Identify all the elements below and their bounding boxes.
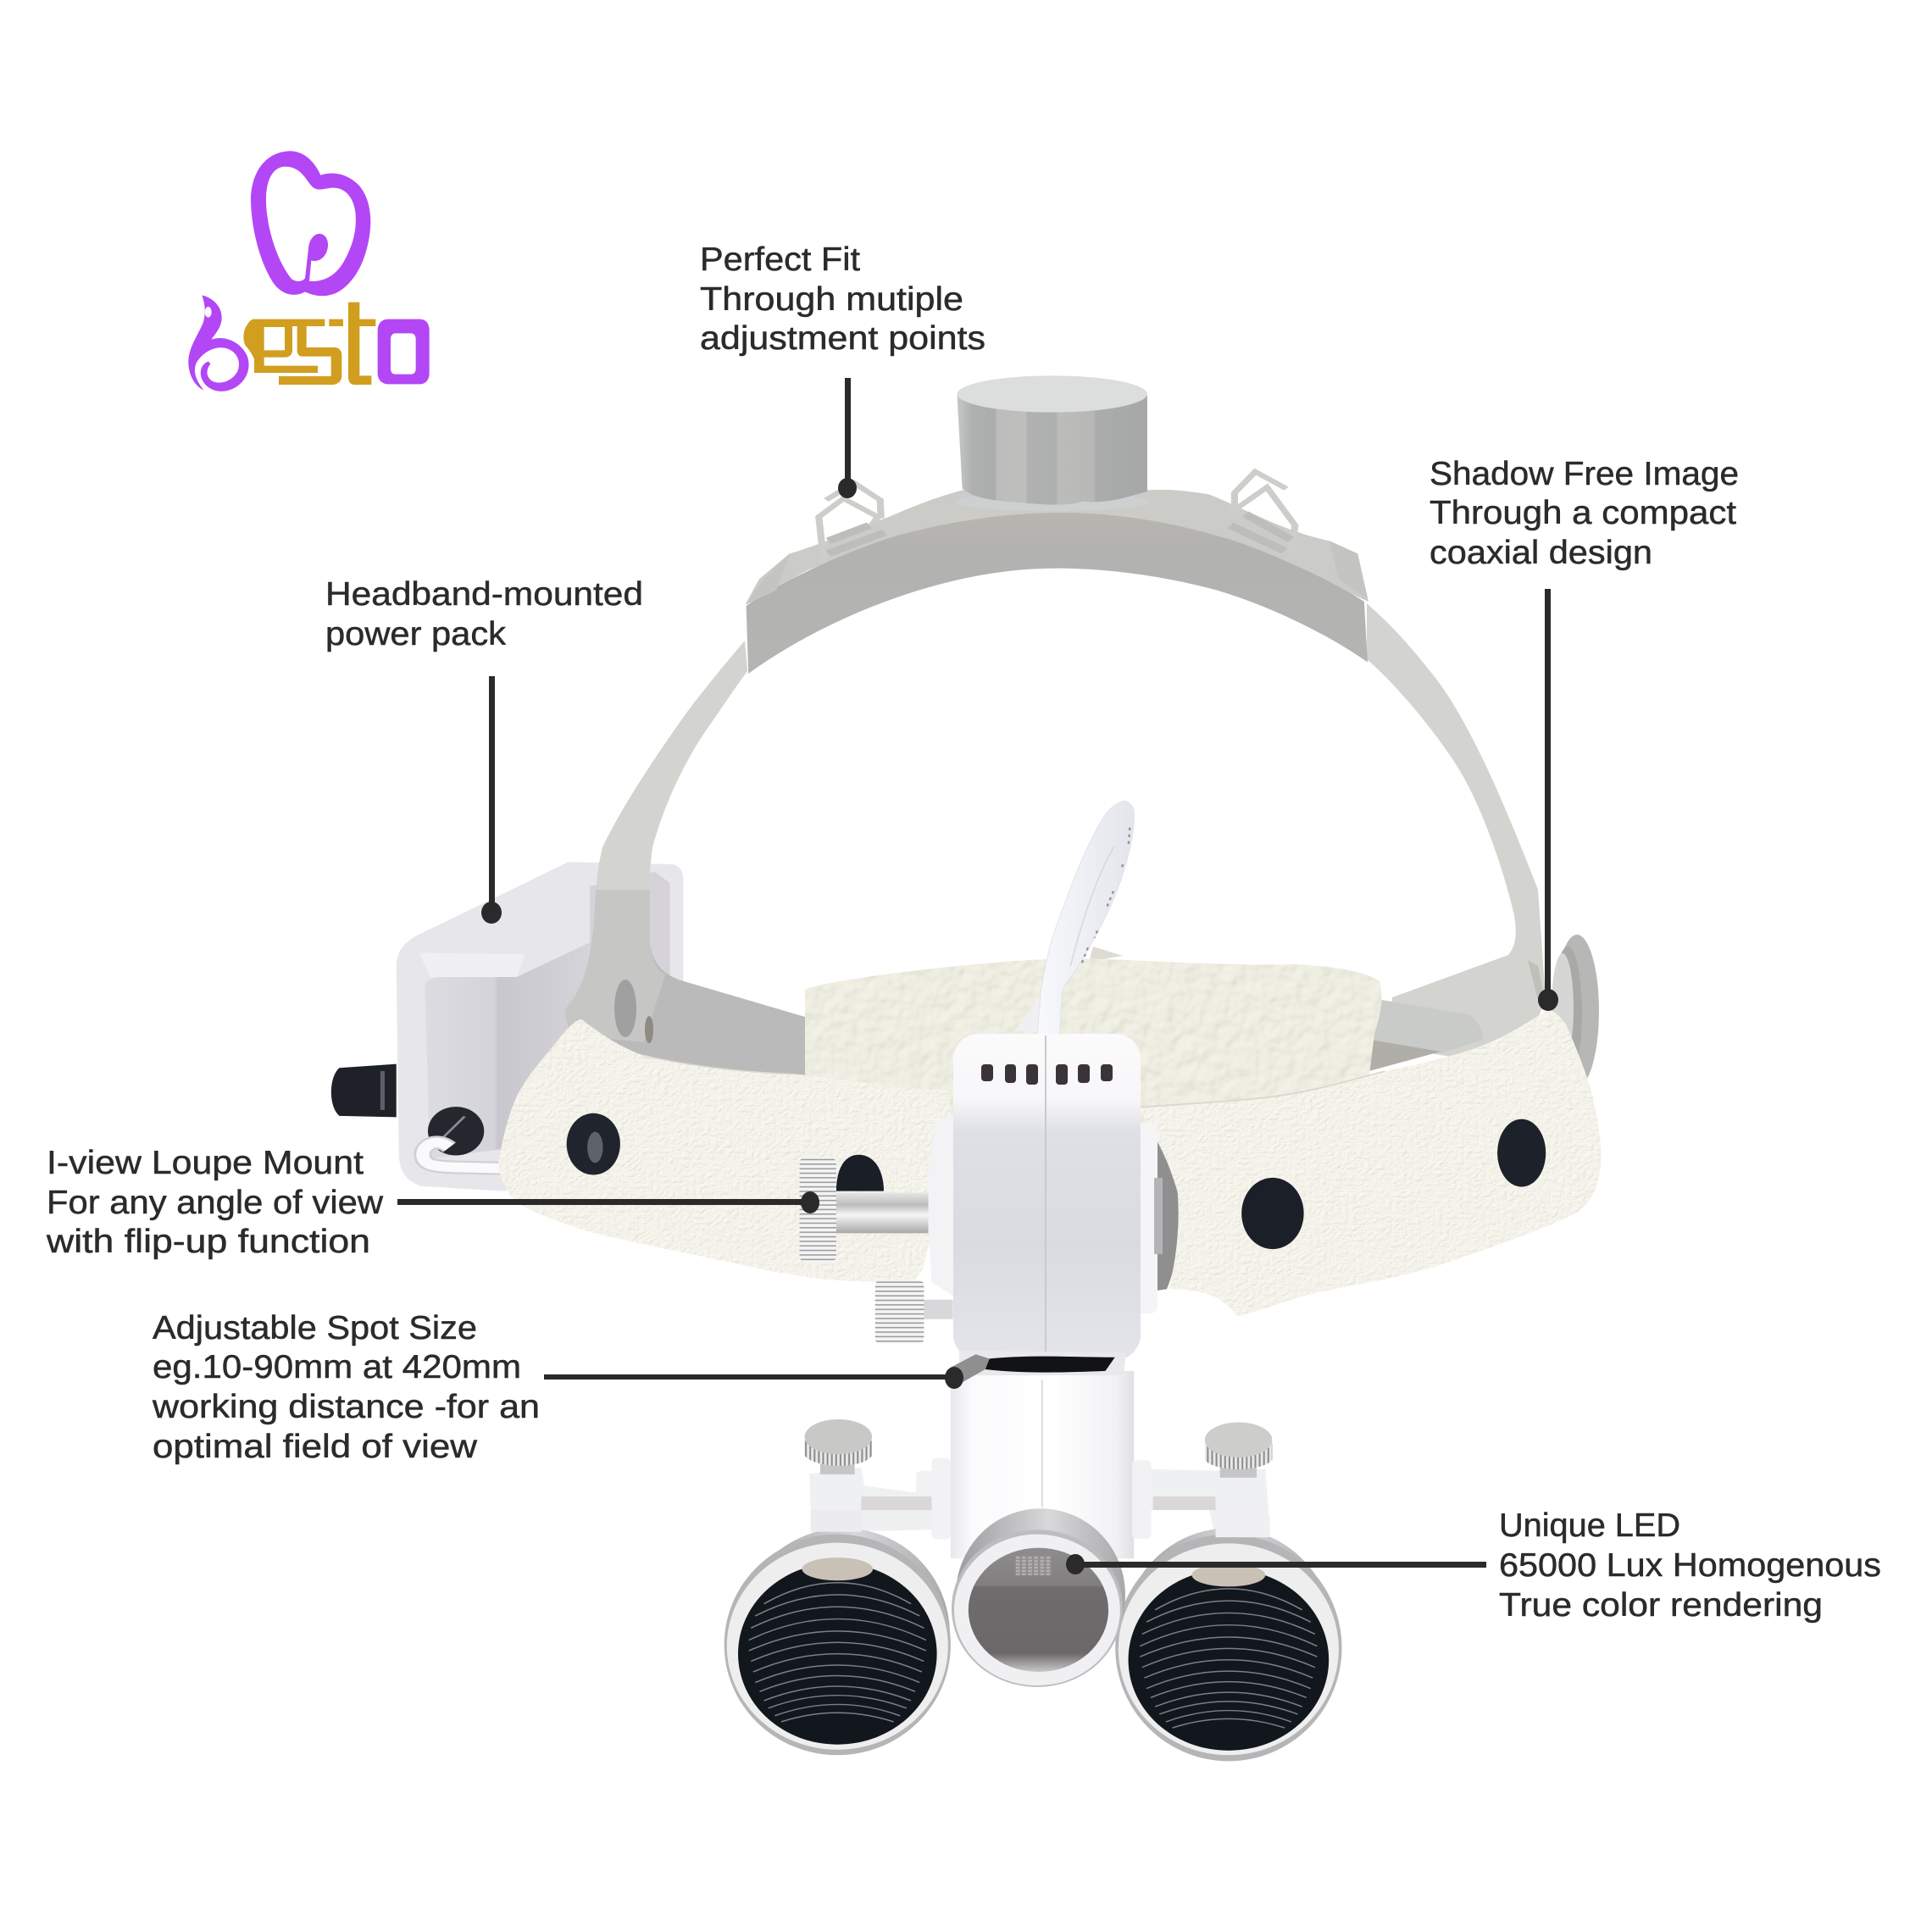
flap top edge shadow	[1139, 1071, 1385, 1108]
plate end caps	[747, 541, 1368, 604]
logo letter: b bird	[188, 295, 249, 391]
logo: besto	[188, 151, 430, 391]
side lugs	[916, 1458, 1152, 1539]
inner highlight	[802, 1557, 873, 1580]
logo letter: s	[279, 319, 343, 385]
ribs	[1140, 1589, 1317, 1728]
dark power knob	[331, 1064, 397, 1117]
flap top edge shadow	[641, 1055, 797, 1074]
logo eye	[205, 307, 212, 318]
leather flap right	[1139, 1009, 1602, 1316]
housing body	[953, 1034, 1141, 1360]
rear leather pad	[805, 958, 1381, 1152]
focus pin	[950, 1354, 990, 1385]
cable ridge	[1070, 846, 1114, 966]
right knurled knob stem	[1220, 1466, 1257, 1478]
LED lens	[969, 1548, 1108, 1672]
callout: shadow free image: coaxial design	[1430, 535, 1652, 571]
knob top	[957, 375, 1147, 413]
grey strap right lower	[1366, 1039, 1441, 1072]
callout: loupe mount: I-view Loupe Mount	[47, 1145, 364, 1181]
outer rim	[724, 1535, 951, 1755]
lower socket	[428, 1107, 484, 1156]
callout: spot size: optimal field of view	[153, 1429, 478, 1465]
snap rivet highlight	[587, 1132, 603, 1163]
headband: top adjustment plate and knob	[746, 375, 1368, 674]
thumbscrew wheel	[800, 1157, 836, 1263]
plate top face	[746, 490, 1368, 604]
thumbscrew shaft	[834, 1193, 929, 1233]
loupe right	[1115, 1528, 1341, 1761]
snap rivet	[836, 1155, 884, 1191]
flap surface	[1139, 1009, 1602, 1316]
callout: perfect fit	[700, 242, 985, 357]
callout: loupe mount: with flip-up function	[46, 1224, 370, 1260]
grey strap right upper	[1366, 997, 1483, 1053]
icon: tooth	[251, 151, 370, 296]
flap surface	[498, 1019, 953, 1282]
box body	[397, 862, 683, 1191]
right bracket	[1135, 1123, 1158, 1313]
barrel	[738, 1528, 950, 1740]
tube seam	[1041, 1380, 1043, 1507]
leather flap left	[498, 1019, 962, 1343]
right knob top	[1205, 1423, 1272, 1457]
mount bracket	[927, 1113, 962, 1302]
callout: spot size	[152, 1310, 540, 1465]
left knurled knob	[805, 1441, 872, 1466]
lower tube	[951, 1371, 1134, 1558]
vent slots	[981, 1064, 1113, 1085]
adjustment clip right	[1230, 472, 1295, 553]
callout: unique LED: True color rendering	[1499, 1587, 1823, 1624]
LED rim	[954, 1535, 1120, 1685]
callout: power pack: power pack	[325, 616, 507, 652]
right arm shade	[1153, 1496, 1216, 1510]
headband: rear leather pad and grey straps	[805, 947, 1483, 1152]
socket highlight	[443, 1117, 464, 1137]
callout: unique LED: 65000 Lux Homogenous	[1499, 1547, 1881, 1584]
housing seam	[1045, 1035, 1046, 1357]
callout: shadow free image	[1430, 456, 1739, 571]
callout: spot size: Adjustable Spot Size	[153, 1310, 477, 1346]
left knurled knob stem	[820, 1462, 855, 1474]
snap rivet	[567, 1113, 620, 1174]
leader line: spot size	[544, 1367, 963, 1389]
disc inner face	[1553, 947, 1582, 1079]
light cable	[1015, 801, 1134, 1042]
leader line: unique LED	[1066, 1554, 1486, 1574]
callout: unique LED: Unique LED	[1499, 1507, 1680, 1544]
plate front face	[747, 513, 1368, 674]
knob body	[957, 396, 1147, 505]
barrel	[1123, 1528, 1335, 1746]
right loupe clamp arm	[1149, 1469, 1270, 1537]
coaxial light housing	[953, 1034, 1163, 1360]
leader line: shadow free	[1538, 589, 1558, 1011]
LED rim outer edge	[952, 1530, 1123, 1687]
box front panel	[425, 941, 598, 1158]
snap rivet	[1497, 1119, 1546, 1187]
headband: left arch strap in front of box	[565, 641, 808, 1080]
ribs	[749, 1583, 926, 1722]
logo letter: o	[378, 319, 430, 384]
black slot band	[985, 1357, 1115, 1373]
callout: spot size: working distance -for an	[152, 1389, 540, 1425]
leader line: loupe mount	[397, 1191, 819, 1213]
pale ring	[1119, 1543, 1339, 1755]
loupe left	[724, 1528, 951, 1755]
leader line: power pack	[481, 676, 502, 924]
strap screw	[645, 1016, 653, 1043]
callout: spot size: eg.10-90mm at 420mm	[153, 1349, 521, 1385]
small secondary cable	[1015, 997, 1040, 1032]
right clamp foot	[1216, 1514, 1269, 1537]
callout: perfect fit: adjustment points	[700, 320, 985, 357]
power pack box	[331, 862, 683, 1191]
grey cylinder behind flap	[1147, 1123, 1181, 1292]
callout: loupe mount: For any angle of view	[47, 1185, 384, 1221]
callout: loupe mount	[46, 1145, 384, 1260]
white power cable	[423, 1142, 503, 1169]
callout: shadow free image: Shadow Free Image	[1430, 456, 1739, 492]
adjustment disc right	[1552, 935, 1599, 1087]
logo letter: e	[243, 319, 325, 373]
outer rim	[1115, 1535, 1341, 1761]
main cable	[1036, 801, 1134, 1042]
strap lobe and horizontal run	[565, 915, 808, 1080]
strap slot	[614, 980, 636, 1037]
printed marks	[1082, 828, 1130, 963]
leader line: perfect fit	[838, 378, 857, 498]
callout: shadow free image: Through a compact	[1430, 495, 1736, 531]
callout: perfect fit: Through mutiple	[700, 281, 963, 318]
strap shaded recess	[1528, 960, 1544, 1000]
lower thumbscrew stem	[923, 1300, 953, 1319]
left loupe clamp arm	[809, 1468, 934, 1533]
box top lid	[419, 952, 525, 979]
lower tube, slot and loupes	[724, 1351, 1341, 1761]
callout: perfect fit: Perfect Fit	[700, 242, 860, 278]
snap rivet	[1241, 1178, 1304, 1249]
cable hump on rear pad	[1089, 947, 1123, 962]
LED barrel	[956, 1508, 1125, 1681]
left clamp foot	[811, 1510, 862, 1532]
strap upper lighter shading	[565, 890, 665, 1042]
callout: power pack: Headband-mounted	[325, 576, 643, 613]
pale ring	[727, 1543, 948, 1750]
left arm shade	[861, 1496, 932, 1510]
left knob top	[805, 1419, 872, 1454]
dark interior	[738, 1563, 937, 1745]
inner highlight	[1191, 1563, 1265, 1586]
knob base	[955, 491, 1149, 511]
callout: unique LED	[1499, 1507, 1881, 1624]
box rear side	[590, 872, 670, 984]
headband: right arch strap	[1367, 603, 1546, 1068]
lower thumbscrew	[875, 1280, 924, 1343]
white power cable shadow	[423, 1142, 503, 1169]
logo letter: t	[348, 303, 375, 385]
right knurled knob	[1205, 1444, 1272, 1469]
callout: power pack	[325, 576, 643, 652]
shaft silver right	[1154, 1178, 1163, 1254]
disc pale face	[1552, 953, 1574, 1063]
LED array	[1014, 1556, 1052, 1575]
adjustment clip left	[819, 483, 885, 564]
dark interior	[1129, 1569, 1329, 1751]
dark power knob highlight	[380, 1071, 385, 1110]
focus slot	[959, 1351, 1126, 1375]
